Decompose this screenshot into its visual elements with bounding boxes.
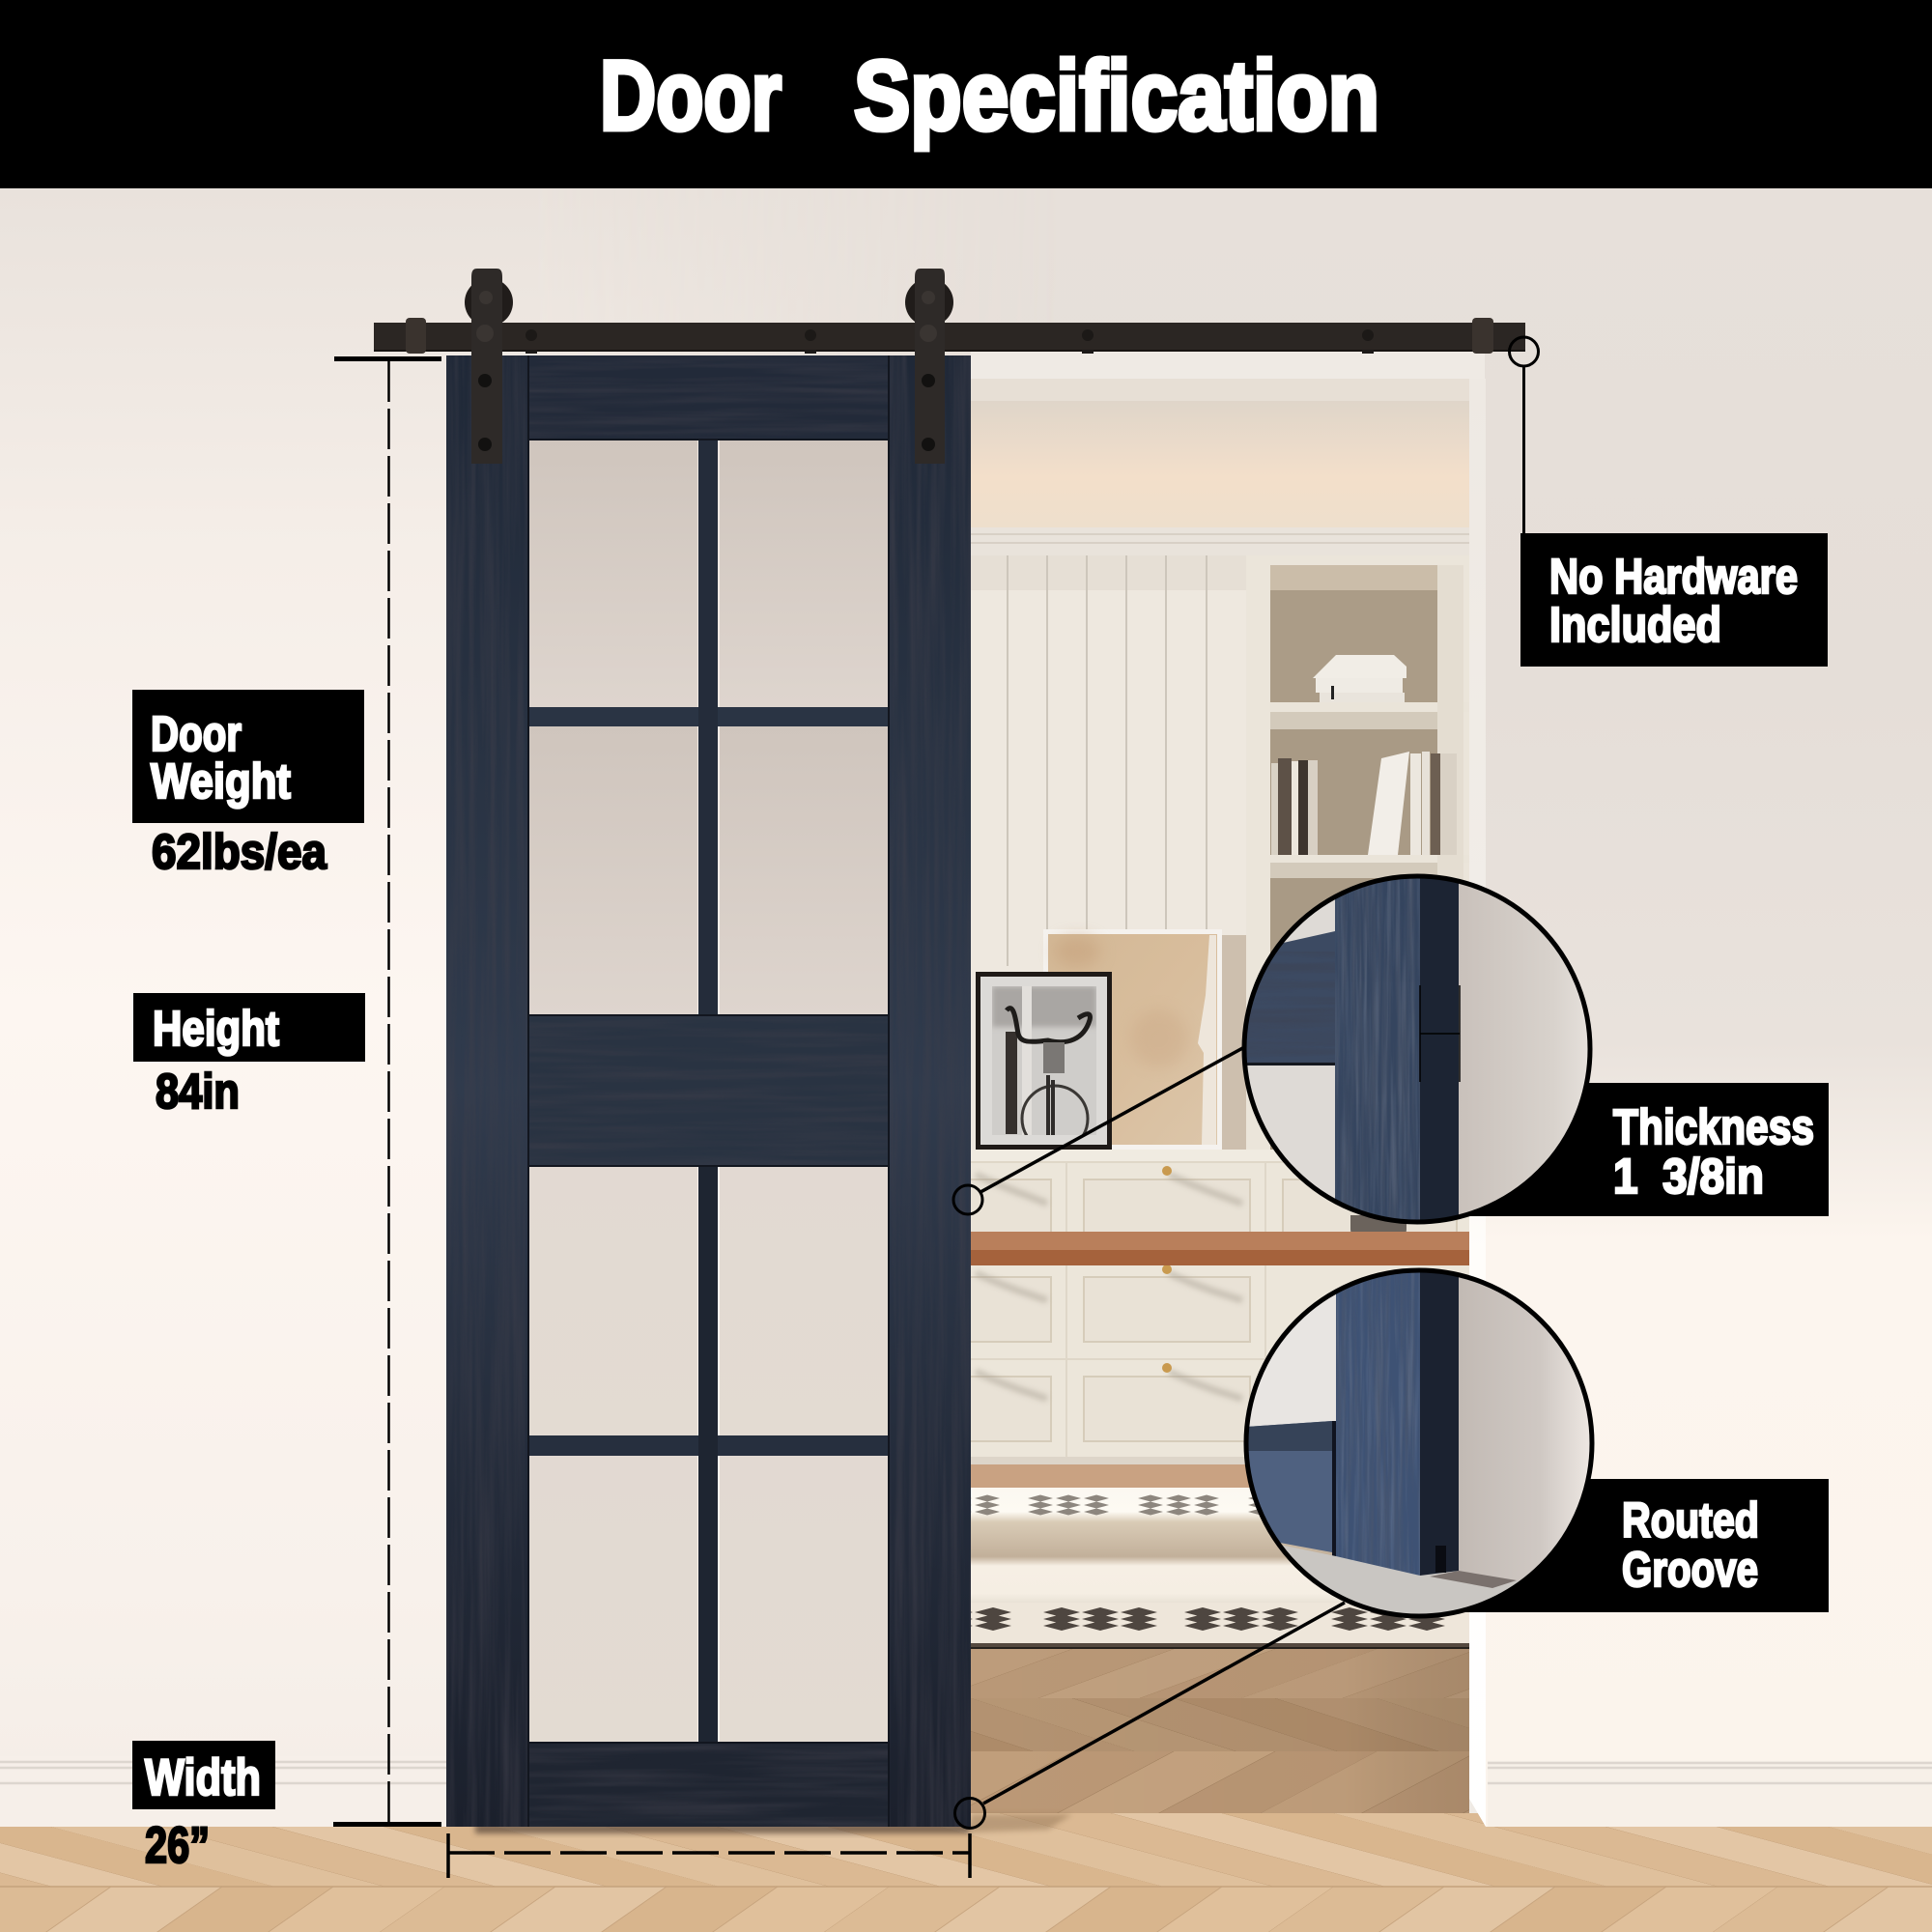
callout leader: thickness <box>953 1046 1246 1214</box>
label: routed groove: Routed <box>1622 1492 1759 1548</box>
left hanger <box>465 269 513 464</box>
door <box>446 355 971 1833</box>
callout leader: routed groove <box>954 1603 1345 1828</box>
track bolts <box>526 329 1374 354</box>
label: thickness: 1 3/8in <box>1613 1149 1764 1204</box>
artwork: bicycle photo <box>976 972 1112 1151</box>
label box: routed groove <box>1449 1479 1829 1612</box>
label: no hardware included: No Hardware <box>1549 549 1798 604</box>
wood grain <box>446 355 971 1827</box>
soffit and ceiling <box>971 379 1469 555</box>
label: routed groove <box>1622 1492 1759 1597</box>
frame <box>446 355 971 1827</box>
floor <box>0 1827 1932 1932</box>
height dimension line <box>333 356 441 1827</box>
artwork: watercolour print <box>1043 929 1246 1150</box>
label: thickness: Thickness <box>1613 1099 1814 1154</box>
title: Specification <box>854 41 1379 151</box>
doorway interior scene <box>970 352 1486 1834</box>
right hanger <box>905 269 953 464</box>
rug pattern <box>897 1495 1445 1631</box>
label: height: 84in <box>156 1064 240 1119</box>
label: width: Width <box>145 1749 261 1806</box>
detail lens: door thickness <box>1244 875 1594 1223</box>
vase <box>1350 1215 1406 1240</box>
header band <box>0 0 1932 188</box>
detail lens: routed groove <box>1244 1270 1594 1623</box>
shadow under door <box>475 1824 970 1833</box>
title <box>600 41 1379 151</box>
label box: thickness <box>1449 1083 1829 1216</box>
width dimension line <box>448 1833 970 1878</box>
label: routed groove: Groove <box>1622 1542 1758 1597</box>
callout leader: no hardware <box>1509 337 1538 533</box>
label: door weight: Door <box>151 706 242 761</box>
books stack <box>1313 655 1406 702</box>
barn door track <box>374 318 1525 354</box>
panes <box>528 440 889 1744</box>
bookcase <box>1246 555 1469 1158</box>
label: no hardware included: Included <box>1549 597 1721 652</box>
cabinets <box>956 1150 1469 1470</box>
label: door weight: Weight <box>151 753 291 809</box>
floor shadow in doorway <box>971 1814 1072 1833</box>
label: height: Height <box>153 1001 279 1056</box>
label: door weight: 62lbs/ea <box>152 824 327 879</box>
label: no hardware included <box>1520 533 1828 667</box>
label: width: 26” <box>145 1817 210 1874</box>
title: Door <box>600 41 781 151</box>
label: height <box>133 993 365 1119</box>
books upright <box>1271 752 1457 855</box>
baseboard <box>0 1756 1932 1827</box>
stoppers <box>406 318 426 354</box>
hall floor and rug <box>897 1464 1486 1827</box>
label: door weight <box>132 690 364 879</box>
label: thickness <box>1613 1099 1814 1204</box>
wainscot panelling <box>971 555 1246 1170</box>
wooden table top <box>971 1232 1469 1265</box>
label: width <box>132 1741 275 1874</box>
door casing <box>1469 379 1486 1827</box>
